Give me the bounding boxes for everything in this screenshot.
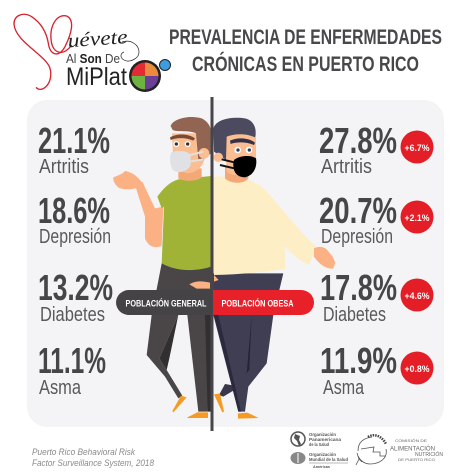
logo: OPS / OMS: [290, 432, 348, 469]
stat: general depresión: 18.6%: [38, 190, 110, 231]
stat: general depresión: Depresión: [39, 226, 111, 248]
stat: general diabetes: [38, 267, 113, 326]
stat: general artritis: [38, 120, 110, 178]
stat: obesa asma: Asma: [323, 377, 365, 399]
logo: Muévete Al Son De MiPlato: MiPlat: [66, 63, 127, 91]
logo: Muévete Al Son De MiPlato: [14, 14, 170, 92]
label: población general: [116, 290, 212, 315]
stat: general artritis: Artritis: [39, 156, 89, 178]
logo: OPS / OMS: de la Salud: [309, 442, 329, 447]
stat: general diabetes: Diabetes: [40, 304, 105, 326]
badge: +4.6%: +4.6%: [404, 291, 430, 301]
stat: obesa diabetes: [320, 267, 434, 326]
label: población obesa: POBLACIÓN OBESA: [222, 298, 294, 308]
badge: +0.8%: +0.8%: [404, 364, 430, 374]
logo: OPS / OMS: Mundial de la Salud: [309, 457, 348, 462]
logo: OPS / OMS: Organización: [309, 452, 336, 457]
divider line: [210, 97, 214, 431]
logo: Comisión de Alimentación y Nutrición: ALIMENTACIÓN: [390, 446, 435, 452]
stat: general asma: 11.1%: [38, 340, 106, 381]
label: población obesa: [213, 290, 314, 315]
stat: obesa artritis: [319, 120, 434, 178]
stat: obesa asma: 11.9%: [320, 340, 397, 381]
stat: general asma: [38, 340, 106, 399]
source note: [32, 447, 154, 468]
stat: obesa depresión: Depresión: [321, 226, 393, 248]
stat: obesa diabetes: 17.8%: [320, 267, 397, 308]
badge: +6.7%: +6.7%: [404, 143, 430, 153]
figure: legs of obese population man: [213, 273, 283, 419]
badge: +2.1%: +2.1%: [404, 213, 430, 223]
stat: general artritis: 21.1%: [38, 120, 110, 161]
logo: Comisión de Alimentación y Nutrición: DE PUERTO RICO: [398, 458, 435, 462]
stat: obesa asma: [320, 340, 434, 399]
stat: obesa depresión: [319, 190, 434, 248]
icon: plate: [129, 60, 170, 92]
panel: background: [27, 100, 444, 427]
logo: Comisión de Alimentación y Nutrición: COMISIÓN DE: [395, 438, 428, 443]
logo: OPS / OMS: Américas: [313, 464, 331, 469]
logo: OPS / OMS: Organización: [309, 432, 336, 437]
title: [169, 25, 442, 76]
figure: upper body of general population man: [113, 117, 211, 289]
source note: Puerto Rico Behavioral Risk: [32, 447, 135, 457]
stat: obesa artritis: 27.8%: [319, 120, 397, 161]
stat: general depresión: [38, 190, 111, 248]
figure: upper body of obese population man: [213, 118, 335, 282]
logo: OPS / OMS: Panamericana: [309, 437, 342, 442]
logo: Comisión de Alimentación y Nutrición: NUTRICIÓN: [415, 451, 443, 458]
logo: Muévete Al Son De MiPlato: uévete: [67, 26, 128, 52]
logo: Comisión de Alimentación y Nutrición: [356, 435, 443, 465]
source note: Factor Surveillance System, 2018: [32, 458, 154, 468]
logo: Muévete Al Son De MiPlato: Al Son De: [66, 52, 120, 66]
label: población general: POBLACIÓN GENERAL: [126, 298, 207, 308]
figure: legs of general population man: [147, 263, 211, 418]
stat: obesa diabetes: Diabetes: [323, 304, 386, 326]
stat: obesa artritis: Artritis: [321, 156, 372, 178]
stat: general diabetes: 13.2%: [38, 267, 113, 308]
stat: general asma: Asma: [39, 377, 82, 399]
stat: obesa depresión: 20.7%: [319, 190, 397, 231]
